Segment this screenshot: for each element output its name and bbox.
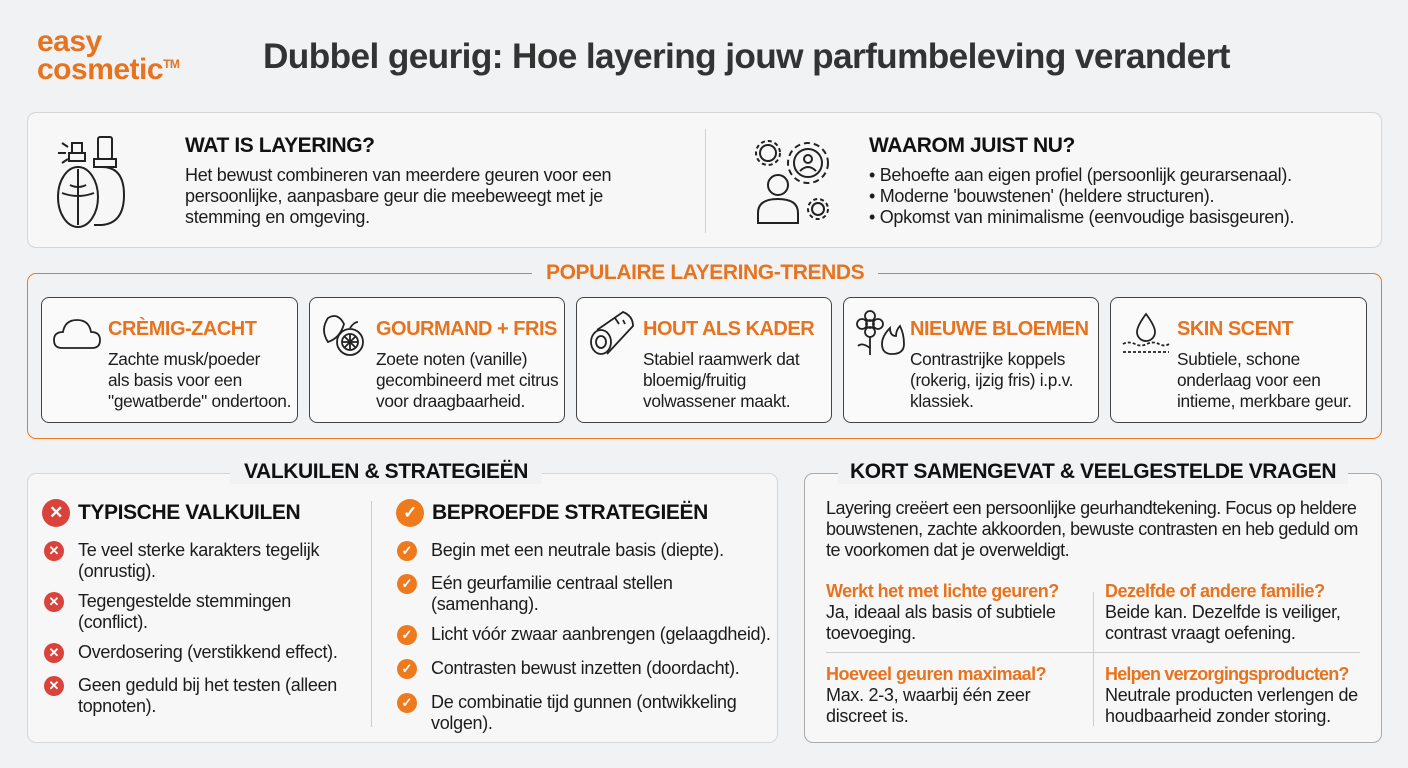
panel: valkuilen & strategieen: Tegengestelde stemmingen (conflict). [78, 591, 291, 632]
heading: beproefde strategieen: BEPROEFDE STRATEGIEËN [432, 501, 708, 524]
card: hout als kader: HOUT ALS KADER [643, 318, 814, 340]
list: reasons: • Opkomst van minimalisme (eenvoudige basisgeuren). [869, 207, 1294, 227]
icon: perfume bottles [57, 136, 125, 228]
heading: trends: POPULAIRE LAYERING-TRENDS [546, 261, 864, 284]
panel: valkuilen & strategieen: ✕ [49, 645, 59, 660]
card: cremig-zacht [41, 297, 298, 423]
panel: valkuilen & strategieen: ✕ [49, 678, 59, 693]
card: skin scent: Subtiele, schone [1177, 349, 1300, 369]
card: gourmand + fris: GOURMAND + FRIS [376, 318, 557, 340]
panel: trends [27, 273, 1382, 439]
list: reasons: • Behoefte aan eigen profiel (persoonlijk geurarsenaal). [869, 165, 1292, 185]
card: nieuwe bloemen: (rokerig, ijzig fris) i.p.v. [910, 370, 1073, 390]
panel: valkuilen & strategieen: ✓ [402, 695, 412, 710]
card: nieuwe bloemen: NIEUWE BLOEMEN [910, 318, 1089, 340]
faq: familie: Dezelfde of andere familie? [1105, 581, 1325, 601]
heading: wat is layering: WAT IS LAYERING? [185, 134, 375, 157]
faq: lichte geuren: Ja, ideaal als basis of subtiele toevoeging. [826, 602, 1056, 643]
faq: lichte geuren: Werkt het met lichte geuren? [826, 581, 1059, 601]
card: skin scent: SKIN SCENT [1177, 318, 1293, 340]
faq: lichte geuren [826, 581, 1059, 643]
panel: valkuilen & strategieen: ✓ [402, 627, 412, 642]
card: hout als kader [576, 297, 832, 423]
logo: easy [37, 25, 102, 58]
title: Dubbel geurig: Hoe layering jouw parfumbeleving verandert [263, 37, 1230, 76]
faq: verzorgingsproducten: Neutrale producten verlengen de houdbaarheid zonder storing. [1105, 685, 1358, 726]
faq: maximaal: Hoeveel geuren maximaal? [826, 664, 1046, 684]
card: cremig-zacht: "gewatberde" ondertoon. [108, 391, 291, 411]
faq: maximaal: Max. 2-3, waarbij één zeer discreet is. [826, 685, 1030, 726]
text: definition: Het bewust combineren van meerdere geuren voor een persoonlijke, aanpasbare geur die meebeweegt met je stemming en omgeving. [185, 165, 611, 227]
card: skin scent: onderlaag voor een [1177, 370, 1321, 390]
card: cremig-zacht: Zachte musk/poeder [108, 349, 260, 369]
card: hout als kader: volwassener maakt. [643, 391, 790, 411]
panel: valkuilen & strategieen: ✓ [402, 661, 412, 676]
card: cremig-zacht: als basis voor een [108, 370, 242, 390]
heading: typische valkuilen: TYPISCHE VALKUILEN [78, 501, 300, 524]
faq: maximaal [826, 664, 1046, 726]
card: hout als kader: bloemig/fruitig [643, 370, 746, 390]
panel: valkuilen & strategieen: Licht vóór zwaar aanbrengen (gelaagdheid). [431, 624, 771, 644]
card: gourmand + fris: voor draagbaarheid. [376, 391, 525, 411]
logo: cosmeticTM [37, 53, 179, 86]
card: cremig-zacht: CRÈMIG-ZACHT [108, 318, 256, 340]
panel: valkuilen & strategieen: ✕ [49, 594, 59, 609]
card: nieuwe bloemen [843, 297, 1099, 423]
logo [37, 25, 180, 86]
list: valkuilen: Te veel sterke karakters tegelijk (onrustig). [78, 540, 319, 581]
panel: valkuilen & strategieen: Geen geduld bij het testen (alleen topnoten). [78, 675, 337, 716]
faq: familie: Beide kan. Dezelfde is veiliger, contrast vraagt oefening. [1105, 602, 1341, 643]
faq: familie [1105, 581, 1341, 643]
card: skin scent: intieme, merkbare geur. [1177, 391, 1352, 411]
panel: intro [27, 112, 1382, 248]
panel: valkuilen & strategieen: Eén geurfamilie centraal stellen (samenhang). [431, 573, 673, 614]
card: nieuwe bloemen: Contrastrijke koppels [910, 349, 1065, 369]
heading: typische valkuilen: ✕ [49, 503, 63, 522]
card: skin scent [1110, 297, 1367, 423]
panel: valkuilen & strategieen: Contrasten bewust inzetten (doordacht). [431, 658, 739, 678]
heading: valkuilen: VALKUILEN & STRATEGIEËN [244, 460, 528, 483]
card: gourmand + fris [309, 297, 565, 423]
heading: waarom juist nu: WAAROM JUIST NU? [869, 134, 1075, 157]
faq: verzorgingsproducten [1105, 664, 1358, 726]
panel: valkuilen & strategieen [27, 473, 778, 743]
card: nieuwe bloemen: klassiek. [910, 391, 974, 411]
panel: valkuilen & strategieen: ✓ [402, 543, 412, 558]
icon: gears and person [755, 140, 829, 224]
panel: valkuilen & strategieen: Overdosering (verstikkend effect). [78, 642, 338, 662]
list: reasons [869, 165, 1294, 227]
faq: verzorgingsproducten: Helpen verzorgingsproducten? [1105, 664, 1349, 684]
card: gourmand + fris: Zoete noten (vanille) [376, 349, 527, 369]
heading: beproefde strategieen: ✓ [403, 503, 417, 522]
panel: valkuilen & strategieen: ✕ [49, 543, 59, 558]
card: hout als kader: Stabiel raamwerk dat [643, 349, 799, 369]
list: reasons: • Moderne 'bouwstenen' (heldere structuren). [869, 186, 1214, 206]
panel: samenvatting & faq [804, 473, 1382, 743]
card: gourmand + fris: gecombineerd met citrus [376, 370, 558, 390]
text: summary: Layering creëert een persoonlijke geurhandtekening. Focus op heldere bouwstenen, zachte akkoorden, bewuste contrasten en heb geduld om te voorkomen dat je overweldigt. [826, 498, 1358, 560]
heading: faq: KORT SAMENGEVAT & VEELGESTELDE VRAGEN [850, 460, 1336, 483]
panel: valkuilen & strategieen: De combinatie tijd gunnen (ontwikkeling volgen). [431, 692, 736, 733]
panel: valkuilen & strategieen: ✓ [402, 576, 412, 591]
list: strategieen: Begin met een neutrale basis (diepte). [431, 540, 724, 560]
